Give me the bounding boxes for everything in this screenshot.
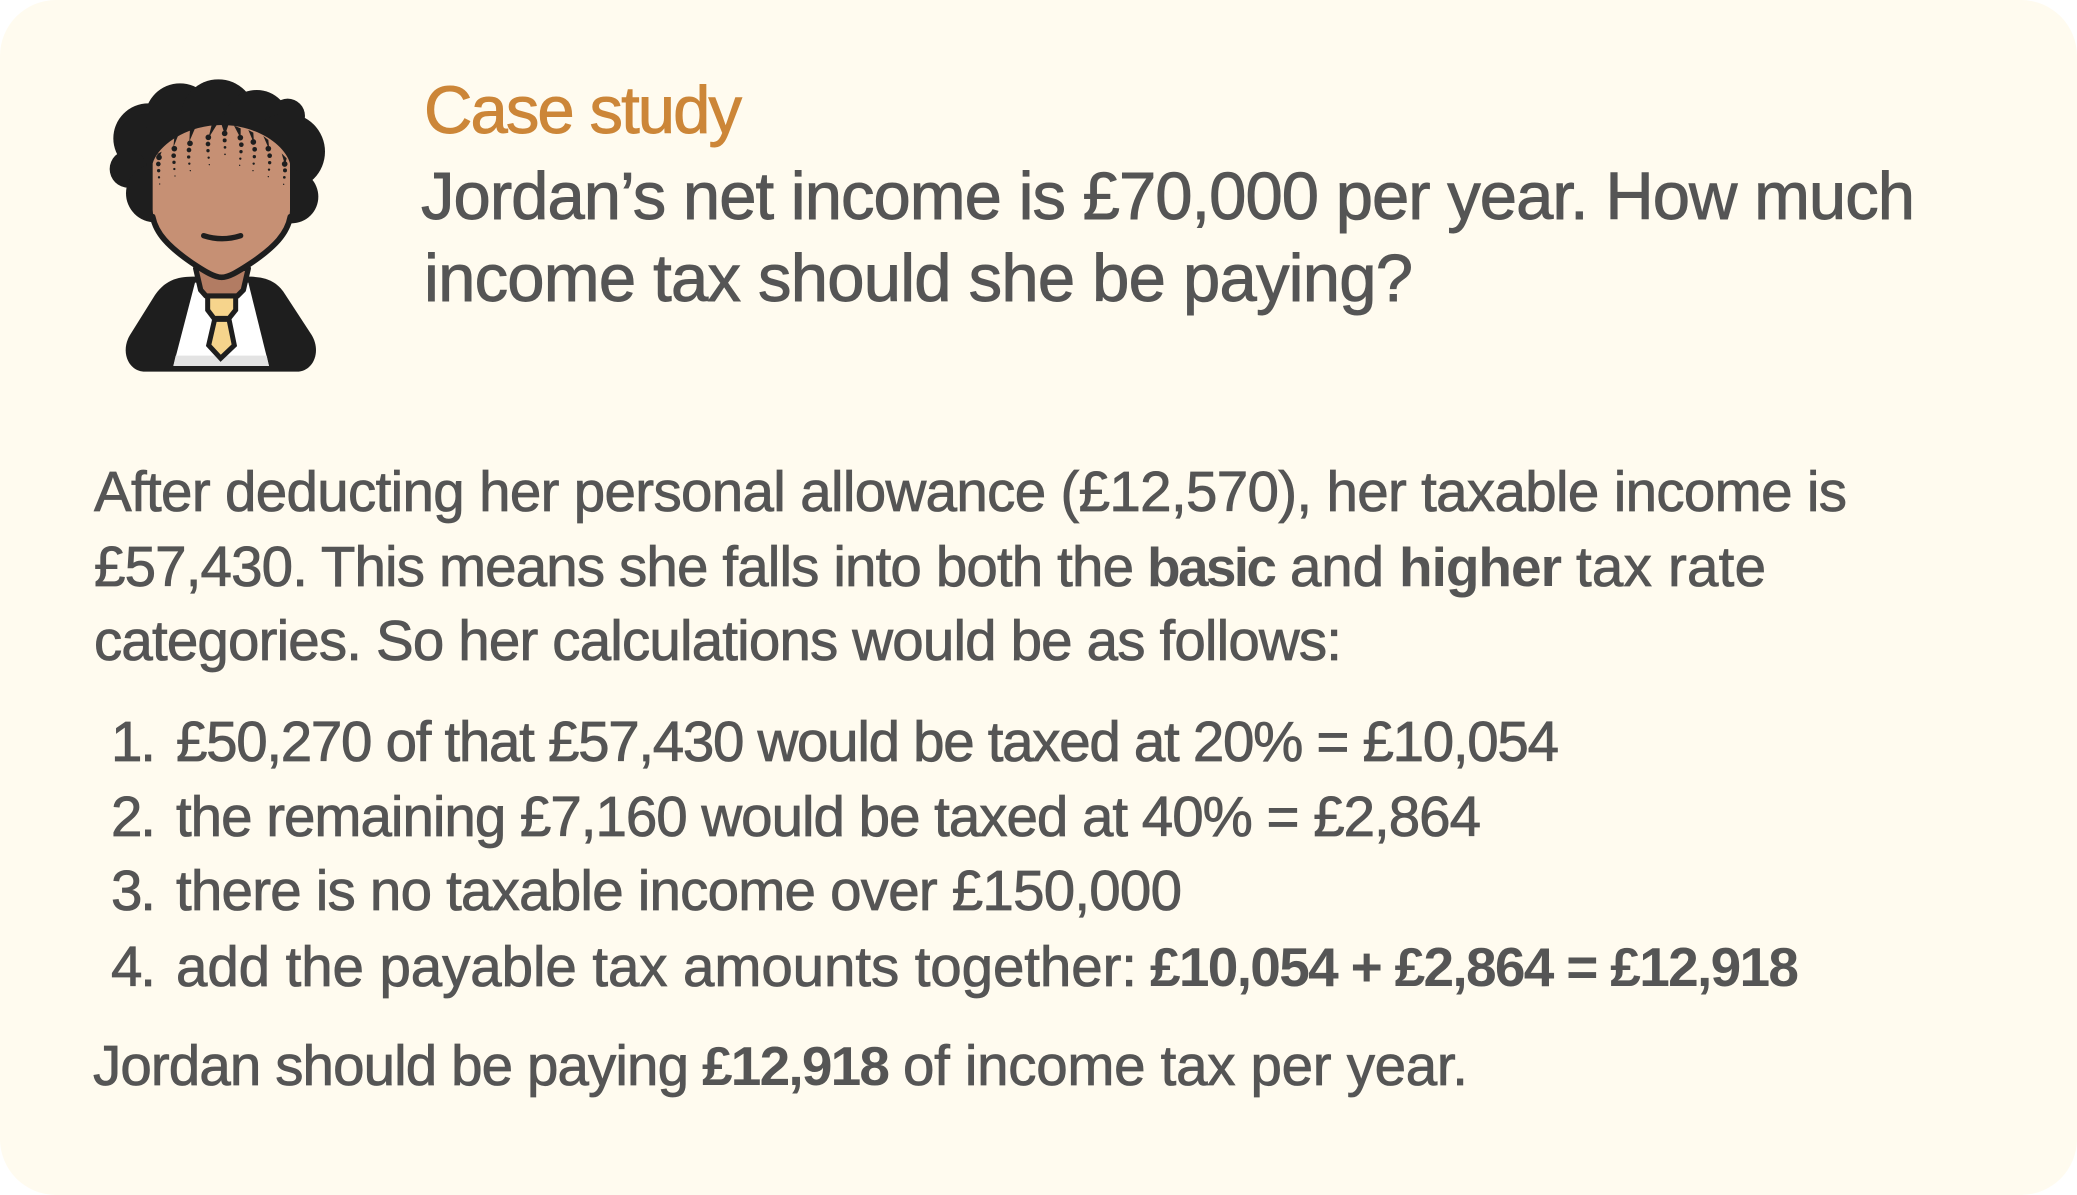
- heading: case study label: Case study: [424, 73, 742, 148]
- numbered list: calculations: 4.: [111, 935, 156, 998]
- text block: introduction: tax rate: [1576, 535, 1766, 598]
- text block: introduction: £57,430. This means she falls into both the: [94, 535, 1134, 598]
- heading: question: income tax should she be paying?: [424, 241, 1413, 316]
- numbered list: calculations: add the payable tax amounts together:: [176, 935, 1137, 998]
- numbered list: calculations: £50,270 of that £57,430 would be taxed at 20% = £10,054: [176, 710, 1559, 773]
- text block: introduction: categories. So her calculations would be as follows:: [94, 609, 1342, 672]
- icon: Jordan avatar: [110, 79, 325, 372]
- numbered list: calculations: there is no taxable income over £150,000: [176, 859, 1182, 922]
- text block: introduction: basic: [1147, 536, 1277, 598]
- text block: introduction: After deducting her personal allowance (£12,570), her taxable income is: [94, 460, 1847, 523]
- heading: question: [421, 159, 1915, 316]
- text block: conclusion: [93, 1034, 1468, 1097]
- text block: introduction: [94, 460, 1847, 672]
- numbered list: calculations: 1.: [111, 710, 156, 773]
- numbered list: calculations: the remaining £7,160 would be taxed at 40% = £2,864: [176, 785, 1481, 848]
- text block: conclusion: of income tax per year.: [903, 1034, 1468, 1097]
- text block: introduction: higher: [1399, 536, 1562, 598]
- numbered list: calculations: £10,054 + £2,864 = £12,918: [1150, 936, 1799, 998]
- numbered list: calculations: [111, 710, 1799, 998]
- heading: question: Jordan’s net income is £70,000 per year. How much: [421, 159, 1915, 234]
- text block: introduction: and: [1290, 535, 1384, 598]
- text block: conclusion: Jordan should be paying: [93, 1034, 689, 1097]
- numbered list: calculations: 3.: [111, 859, 156, 922]
- text block: conclusion: £12,918: [702, 1035, 890, 1097]
- numbered list: calculations: 2.: [111, 785, 156, 848]
